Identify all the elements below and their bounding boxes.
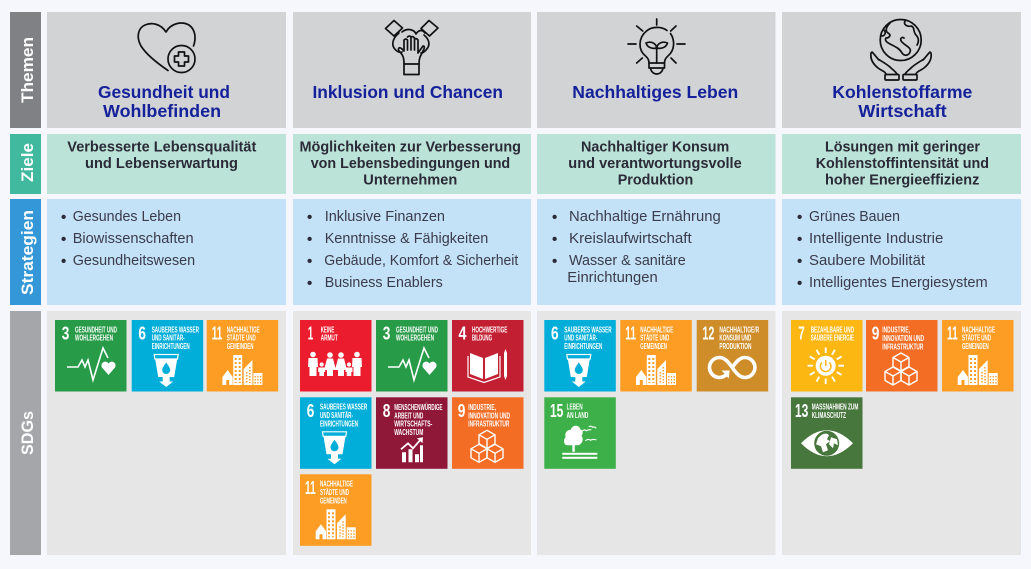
panel: strategies Kohlenstoffarme Wirtschaft: • xyxy=(797,253,802,270)
SDG tile 11: NACHHALTIGE xyxy=(640,325,674,334)
panel: theme Nachhaltiges Leben xyxy=(537,12,776,128)
SDG tile 13: MASSNAHMEN ZUM xyxy=(812,403,858,412)
panel: goal Inklusion: Möglichkeiten zur Verbesserung xyxy=(300,138,521,156)
SDG tile 6: 6 xyxy=(551,322,559,344)
SDG tile 6 xyxy=(132,320,203,392)
row label: Themen xyxy=(10,12,41,128)
SDG tile 8: WIRTSCHAFTS- xyxy=(394,420,432,429)
SDG tile 6: 6 xyxy=(307,400,314,421)
panel: goal Inklusion: von Lebensbedingungen und xyxy=(311,155,510,172)
heading: Nachhaltiges Leben: Nachhaltiges Leben xyxy=(572,82,738,102)
SDG tile 13: KLIMASCHUTZ xyxy=(812,411,846,420)
SDG tile 6 xyxy=(300,397,372,469)
row label: Strategien xyxy=(10,199,41,305)
panel: goal Inklusion xyxy=(293,134,531,194)
panel: goal Kohlenstoffarme Wirtschaft: Kohlenstoffintensität und xyxy=(816,155,989,172)
SDG tile 11: NACHHALTIGE xyxy=(227,325,260,334)
SDG tile 9 xyxy=(866,320,938,392)
panel: strategies Nachhaltiges Leben: • xyxy=(552,209,557,226)
panel: strategies Nachhaltiges Leben: Wasser & sanitäre xyxy=(569,252,686,269)
SDG tile 7: 7 xyxy=(798,322,805,344)
row label: Strategien: Strategien xyxy=(18,210,37,295)
SDG tile 6: EINRICHTUNGEN xyxy=(564,342,602,351)
panel: goal Nachhaltiges Leben xyxy=(537,134,776,194)
column: Nachhaltiges Leben xyxy=(537,12,776,555)
panel: SDGs Inklusion xyxy=(293,311,531,555)
panel: strategies Inklusion: Business Enablers xyxy=(325,274,443,291)
SDG tile 6: SAUBERES WASSER xyxy=(564,325,612,334)
SDG tile 6: EINRICHTUNGEN xyxy=(320,419,358,428)
SDG tile 9: INDUSTRIE, xyxy=(882,326,910,335)
row label: Themen: Themen xyxy=(18,37,37,103)
SDG tile 4: HOCHWERTIGE xyxy=(472,325,508,334)
SDG tile 3: WOHLERGEHEN xyxy=(75,334,113,343)
SDG tile 15: 15 xyxy=(550,400,563,421)
icon: globe in hands xyxy=(871,20,931,80)
panel: strategies Nachhaltiges Leben: Kreislaufwirtschaft xyxy=(569,230,693,247)
panel: strategies Kohlenstoffarme Wirtschaft: Grünes Bauen xyxy=(809,208,900,225)
column: Inklusion und Chancen xyxy=(293,12,531,555)
row label: SDGs xyxy=(10,311,41,555)
panel: strategies Gesundheit: Biowissenschaften xyxy=(73,230,194,247)
SDG tile 8: ARBEIT UND xyxy=(394,411,423,420)
SDG tile 6: UND SANITÄR- xyxy=(564,333,597,343)
SDG tile 8: 8 xyxy=(383,400,390,421)
SDG tile 15: AN LAND xyxy=(567,411,588,420)
panel: strategies Nachhaltiges Leben: • xyxy=(552,231,557,248)
SDG tile 11: STÄDTE UND xyxy=(962,333,991,343)
SDG tile 12: NACHHALTIGE/R xyxy=(719,325,759,334)
SDG tile 9 xyxy=(452,397,524,469)
SDG tile 6: UND SANITÄR- xyxy=(152,333,185,343)
SDG tile 9: INDUSTRIE, xyxy=(468,403,496,412)
SDG tile 6: SAUBERES WASSER xyxy=(152,325,199,334)
SDG tile 8 xyxy=(376,397,448,469)
panel: goal Nachhaltiges Leben: Nachhaltiger Konsum xyxy=(581,138,729,156)
SDG tile 11: GEMEINDEN xyxy=(962,342,989,351)
panel: strategies Inklusion: • xyxy=(307,209,312,226)
SDG tile 12: PRODUKTION xyxy=(719,342,751,351)
SDG tile 1: 1 xyxy=(308,322,313,344)
SDG tile 15: LEBEN xyxy=(567,403,583,412)
heading: Gesundheit und Wohlbefinden: Wohlbefinden xyxy=(103,101,221,121)
icon: joined hands xyxy=(386,20,438,74)
SDG tile 3: GESUNDHEIT UND xyxy=(75,325,117,334)
icon: light bulb with sprout xyxy=(628,19,685,74)
SDG tile 6 xyxy=(544,320,616,392)
panel: goal Inklusion: Unternehmen xyxy=(363,172,457,188)
panel: strategies Kohlenstoffarme Wirtschaft: Intelligente Industrie xyxy=(809,230,943,247)
SDG tile 3: 3 xyxy=(383,322,390,344)
SDG tile 11: 11 xyxy=(212,322,222,344)
SDG tile 9: 9 xyxy=(458,400,465,421)
SDG tile 11: GEMEINDEN xyxy=(320,496,347,505)
panel: goal Nachhaltiges Leben: und verantwortungsvolle xyxy=(568,155,742,172)
panel: strategies Inklusion: • xyxy=(307,253,312,270)
SDG tile 3 xyxy=(55,320,126,392)
SDG tile 1: ARMUT xyxy=(321,334,338,343)
panel: strategies Inklusion: Gebäude, Komfort & Sicherheit xyxy=(324,252,519,269)
panel: SDGs Kohlenstoffarme Wirtschaft xyxy=(782,311,1021,555)
SDG tile 1: KEINE xyxy=(321,325,335,334)
SDG tile 4: 4 xyxy=(458,322,467,344)
SDG tile 11: NACHHALTIGE xyxy=(962,325,995,334)
SDG tile 9: 9 xyxy=(872,322,879,344)
panel: goal Kohlenstoffarme Wirtschaft: Lösungen mit geringer xyxy=(825,138,980,156)
panel: strategies Gesundheit: Gesundes Leben xyxy=(73,208,181,225)
panel: SDGs Gesundheit xyxy=(47,311,286,555)
SDG tile 6: EINRICHTUNGEN xyxy=(152,342,190,351)
heading: Kohlenstoffarme Wirtschaft xyxy=(832,82,973,121)
heading: Gesundheit und Wohlbefinden xyxy=(98,82,230,121)
panel: theme Inklusion xyxy=(293,12,531,128)
SDG tile 11: NACHHALTIGE xyxy=(320,480,353,489)
SDG tile 11: GEMEINDEN xyxy=(640,342,667,351)
panel: strategies Inklusion: Inklusive Finanzen xyxy=(325,208,445,225)
SDG tile 12 xyxy=(697,320,768,392)
panel: strategies Nachhaltiges Leben: Einrichtungen xyxy=(567,269,658,286)
panel: strategies Gesundheit xyxy=(47,199,286,305)
icon: heart with medical cross xyxy=(138,23,195,72)
column: Kohlenstoffarme Wirtschaft xyxy=(782,12,1021,555)
heading: Kohlenstoffarme Wirtschaft: Wirtschaft xyxy=(858,101,947,121)
SDG tile 7: BEZAHLBARE UND xyxy=(811,325,854,334)
row label: Ziele: Ziele xyxy=(18,143,37,182)
panel: strategies Kohlenstoffarme Wirtschaft: • xyxy=(797,209,802,226)
column: Gesundheit und Wohlbefinden xyxy=(47,12,286,555)
heading: Inklusion und Chancen: Inklusion und Chancen xyxy=(312,82,503,102)
SDG tile 11: GEMEINDEN xyxy=(227,342,253,351)
SDG tile 15 xyxy=(544,397,616,469)
SDG tile 9: INFRASTRUKTUR xyxy=(468,420,509,429)
SDG tile 1 xyxy=(300,320,372,392)
SDG tile 13 xyxy=(791,397,862,469)
panel: strategies Inklusion xyxy=(293,199,531,305)
SDG tile 3: WOHLERGEHEN xyxy=(396,334,434,343)
SDG tile 3: GESUNDHEIT UND xyxy=(396,325,438,334)
panel: goal Nachhaltiges Leben: Produktion xyxy=(618,172,693,188)
panel: goal Gesundheit: und Lebenserwartung xyxy=(85,155,238,172)
SDG tile 11: 11 xyxy=(305,477,316,498)
panel: goal Kohlenstoffarme Wirtschaft: hoher Energieeffizienz xyxy=(825,172,979,188)
panel: strategies Nachhaltiges Leben: Nachhaltige Ernährung xyxy=(569,208,721,225)
panel: strategies Inklusion: Kenntnisse & Fähigkeiten xyxy=(325,230,488,247)
panel: strategies Inklusion: • xyxy=(307,231,312,248)
panel: strategies Gesundheit: Gesundheitswesen xyxy=(73,252,195,269)
SDG tile 6: UND SANITÄR- xyxy=(320,410,353,420)
panel: strategies Nachhaltiges Leben xyxy=(537,199,776,305)
SDG tile 11: 11 xyxy=(947,322,958,344)
SDG tile 8: MENSCHENWÜRDIGE xyxy=(394,402,443,412)
heading: Kohlenstoffarme Wirtschaft: Kohlenstoffarme xyxy=(832,82,973,102)
SDG tile 11: STÄDTE UND xyxy=(227,333,256,343)
row label: SDGs: SDGs xyxy=(18,411,37,455)
panel: goal Gesundheit xyxy=(47,134,286,194)
panel: strategies Inklusion: • xyxy=(307,275,312,292)
panel: strategies Kohlenstoffarme Wirtschaft: • xyxy=(797,275,802,292)
panel: strategies Gesundheit: • xyxy=(61,253,66,270)
SDG tile 9: INNOVATION UND xyxy=(882,334,924,343)
SDG tile 8: WACHSTUM xyxy=(394,428,423,437)
SDG tile 4 xyxy=(452,320,524,392)
SDG tile 11 xyxy=(207,320,278,392)
SDG tile 13: 13 xyxy=(795,400,808,421)
panel: SDGs Nachhaltiges Leben xyxy=(537,311,776,555)
panel: strategies Kohlenstoffarme Wirtschaft xyxy=(782,199,1021,305)
panel: goal Kohlenstoffarme Wirtschaft xyxy=(782,134,1021,194)
SDG tile 12: KONSUM UND xyxy=(719,334,751,343)
SDG tile 7: SAUBERE ENERGIE xyxy=(811,334,854,343)
SDG tile 11: STÄDTE UND xyxy=(320,487,349,497)
SDG tile 11 xyxy=(300,474,372,546)
SDG tile 9: INFRASTRUKTUR xyxy=(882,342,923,351)
heading: Gesundheit und Wohlbefinden: Gesundheit und xyxy=(98,82,230,102)
panel: strategies Kohlenstoffarme Wirtschaft: • xyxy=(797,231,802,248)
SDG tile 11 xyxy=(942,320,1014,392)
SDG tile 9: INNOVATION UND xyxy=(468,411,510,420)
panel: goal Gesundheit: Verbesserte Lebensqualität xyxy=(67,138,256,156)
row label: Ziele xyxy=(10,134,41,194)
panel: strategies Kohlenstoffarme Wirtschaft: Intelligentes Energiesystem xyxy=(809,274,988,291)
panel: theme Kohlenstoffarme Wirtschaft xyxy=(782,12,1021,128)
SDG tile 3: 3 xyxy=(62,322,69,344)
panel: strategies Kohlenstoffarme Wirtschaft: Saubere Mobilität xyxy=(809,252,926,269)
SDG tile 11: 11 xyxy=(625,322,636,344)
SDG tile 11 xyxy=(620,320,692,392)
SDG tile 6: SAUBERES WASSER xyxy=(320,403,367,412)
SDG tile 7 xyxy=(791,320,862,392)
panel: strategies Nachhaltiges Leben: • xyxy=(552,253,557,270)
SDG tile 12: 12 xyxy=(702,322,714,344)
panel: strategies Gesundheit: • xyxy=(61,209,66,226)
SDG tile 3 xyxy=(376,320,448,392)
SDG tile 11: STÄDTE UND xyxy=(640,333,669,343)
SDG tile 4: BILDUNG xyxy=(472,334,492,343)
SDG tile 6: 6 xyxy=(138,322,146,344)
panel: theme Gesundheit xyxy=(47,12,286,128)
panel: strategies Gesundheit: • xyxy=(61,231,66,248)
